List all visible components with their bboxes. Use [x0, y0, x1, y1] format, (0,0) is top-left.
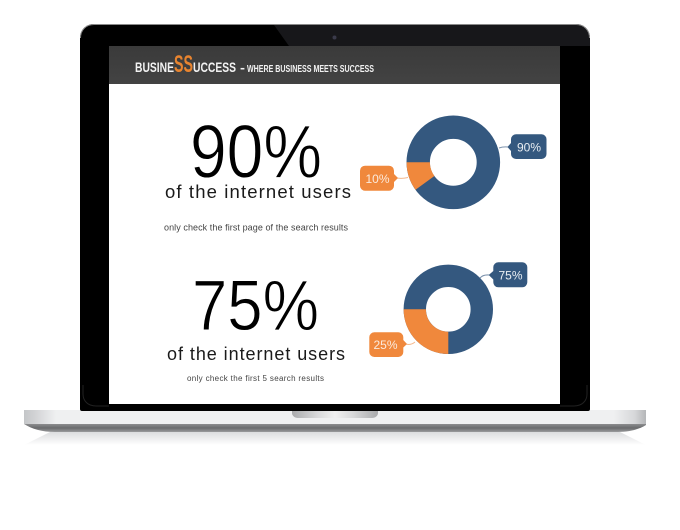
- laptop base: [24, 410, 646, 445]
- header bar: [109, 46, 560, 84]
- laptop lid: [80, 24, 590, 411]
- callout: 90%: [499, 134, 546, 159]
- callout: 75%: [480, 262, 527, 287]
- screen: [109, 84, 560, 404]
- orange slice 10%: [407, 162, 434, 190]
- subheading: of the internet users: [167, 344, 345, 364]
- big number 75%: 75%: [192, 267, 319, 346]
- big number 90%: 90%: [190, 110, 322, 194]
- brand title: UCCESS: [193, 59, 236, 75]
- caption: only check the first 5 search results: [187, 374, 324, 383]
- callout: 25%: 25%: [373, 338, 398, 352]
- callout: 75%: 75%: [498, 268, 523, 282]
- orange slice 25%: [404, 309, 448, 354]
- brand title: -: [240, 60, 245, 75]
- brand title: WHERE BUSINESS MEETS SUCCESS: [247, 63, 374, 75]
- donut chart: 90/10: [360, 127, 546, 197]
- subheading: of the internet users: [165, 181, 351, 202]
- stat block: 90%: [164, 110, 351, 232]
- brand title: SS: [174, 51, 193, 78]
- callout: 25%: [369, 332, 415, 357]
- caption: only check the first page of the search results: [164, 222, 348, 232]
- donut chart: 75/25: [369, 262, 527, 357]
- brand title: [135, 51, 374, 78]
- callout: 10%: [360, 166, 408, 191]
- webcam: [332, 36, 336, 40]
- stat block: 75%: [167, 267, 345, 383]
- callout: 10%: 10%: [365, 172, 390, 186]
- callout: 90%: 90%: [517, 140, 541, 154]
- hinge notch: [292, 410, 378, 418]
- brand title: BUSINE: [135, 59, 174, 75]
